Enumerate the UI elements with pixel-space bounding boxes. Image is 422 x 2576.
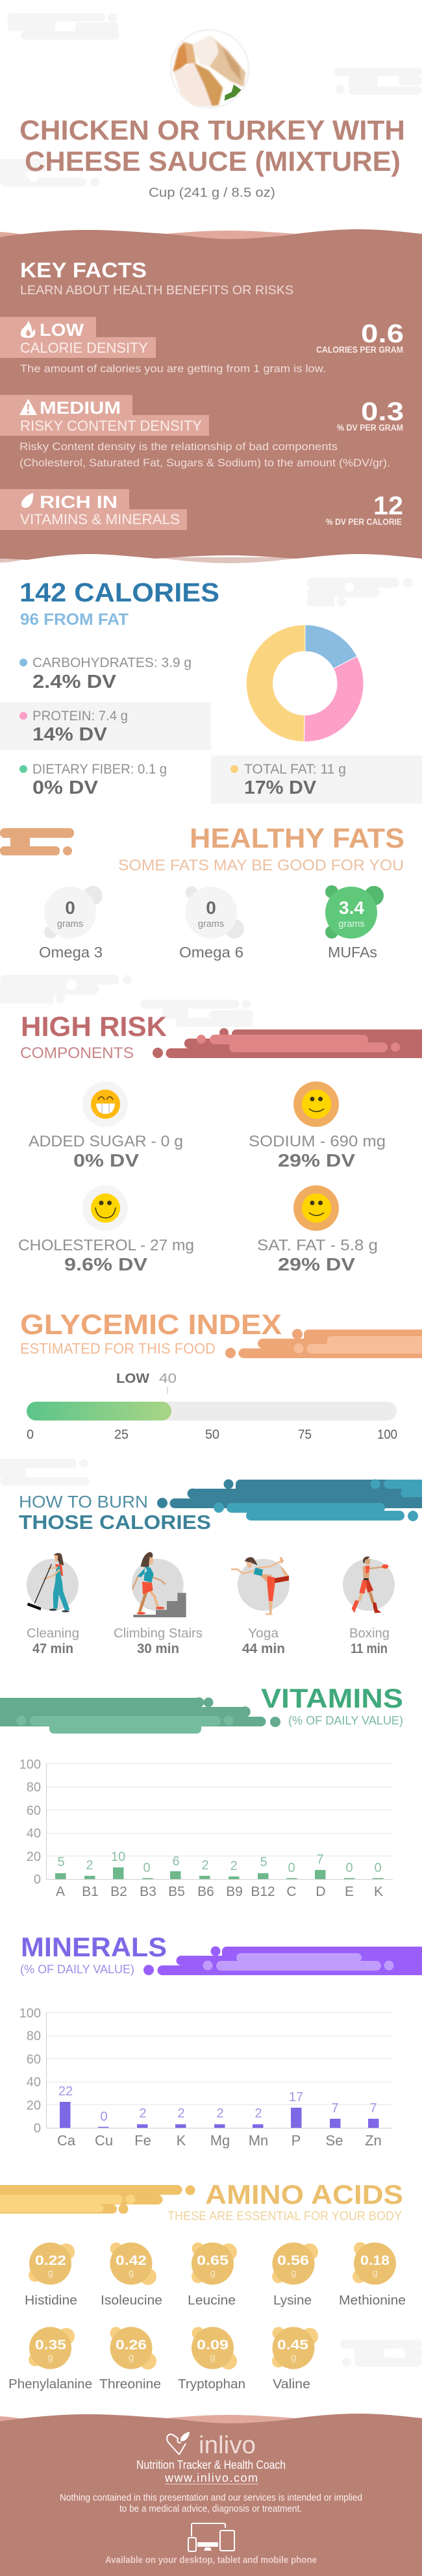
- decoration: burn streak: [157, 1480, 422, 1521]
- stat: 12 percent dv per calorie: [326, 492, 403, 527]
- stat: 0.3 percent dv per gram: % DV PER GRAM: [337, 423, 403, 433]
- text: availability: Available on your desktop, tablet and mobile phone: [105, 2555, 317, 2566]
- decoration: glycemic streak: [225, 1329, 422, 1358]
- stat: 0.6 calories per gram: 0.6: [361, 320, 404, 348]
- heading: vitamins: VITAMINS: [261, 1683, 403, 1713]
- row: protein: [0, 702, 211, 750]
- icon: leaf: [21, 493, 33, 508]
- activity: boxing: 11 min: [351, 1641, 388, 1656]
- risk item: sodium: [249, 1081, 386, 1170]
- amino: valine: 0.45: [277, 2338, 308, 2353]
- chart: vitamins bar chart: B3: [140, 1884, 156, 1899]
- chart: minerals bar chart: Se: [326, 2132, 343, 2149]
- heading: glycemic index: GLYCEMIC INDEX: [20, 1309, 282, 1341]
- chart: vitamins bar chart: A: [56, 1884, 65, 1899]
- chart: vitamins bar chart: 0: [374, 1861, 382, 1875]
- chart: vitamins bar chart: B5: [168, 1884, 185, 1899]
- risk item: saturated fat: 29% DV: [278, 1254, 355, 1274]
- decoration: amino acids streak: [0, 2185, 195, 2214]
- row: carbohydrates: 2.4% DV: [32, 672, 117, 692]
- chart: vitamins bar chart: 60: [27, 1804, 41, 1818]
- amino: histidine: g: [47, 2267, 53, 2279]
- title: CHEESE SAUCE (MIXTURE): [25, 146, 401, 177]
- chart: minerals bar chart: 2: [254, 2106, 262, 2121]
- amino: phenylalanine: Phenylalanine: [8, 2377, 92, 2392]
- heading: amino acids: AMINO ACIDS: [205, 2179, 403, 2210]
- icon: woman in yoga pose: [231, 1557, 290, 1615]
- chart: vitamins bar chart: B2: [110, 1884, 127, 1899]
- amino: tryptophan: Tryptophan: [178, 2377, 245, 2392]
- stat: omega 6: [179, 886, 244, 961]
- chart: vitamins bar chart: C: [286, 1884, 297, 1899]
- chart: glycemic index scale: LOW: [116, 1371, 149, 1386]
- logo: inlivo: [167, 2432, 256, 2459]
- row: protein: PROTEIN: 7.4 g: [32, 709, 128, 724]
- chart: glycemic index scale: 75: [298, 1428, 312, 1442]
- amino: methionine: 0.18: [360, 2253, 390, 2268]
- chart: vitamins bar chart: 6: [172, 1854, 180, 1869]
- chart: vitamins bar chart: B1: [82, 1884, 99, 1899]
- amino: leucine: g: [210, 2267, 216, 2279]
- icon: flame: [21, 320, 35, 338]
- stat: omega 6: 0: [206, 898, 216, 918]
- chart: vitamins bar chart: 5: [57, 1855, 65, 1869]
- stat: mufas: MUFAs: [328, 944, 377, 961]
- chart: vitamins bar chart: 5: [260, 1855, 267, 1869]
- text: disclaimer: to be a medical advice, diagnosis or treatment.: [119, 2503, 302, 2514]
- text: risky content note: (Cholesterol, Saturated Fat, Sugars & Sodium) to the amount (%DV/gr).: [19, 457, 390, 469]
- icon: smiling face: [91, 1194, 120, 1222]
- title: [19, 115, 405, 177]
- stat: 0.3 percent dv per gram: 0.3: [361, 398, 404, 426]
- chart: macronutrient donut: [246, 625, 364, 742]
- heading: calories: 142 CALORIES: [19, 577, 219, 607]
- stat: omega 3: 0: [65, 898, 75, 918]
- tag: rich in vitamins and minerals: VITAMINS & MINERALS: [20, 511, 180, 527]
- chart: minerals bar chart: P: [292, 2132, 301, 2149]
- subheading: calories from fat: 96 FROM FAT: [20, 611, 129, 629]
- activity: yoga: [231, 1557, 290, 1656]
- decoration: vitamins streak: [0, 1697, 280, 1734]
- amino: isoleucine: 0.42: [116, 2253, 147, 2268]
- chart: vitamins bar chart: 20: [27, 1850, 41, 1864]
- tag: low calorie density: LOW: [40, 320, 84, 340]
- stat: omega 6: Omega 6: [179, 944, 243, 961]
- chart: minerals bar chart: Ca: [57, 2132, 76, 2149]
- stat: mufas: [325, 885, 384, 961]
- risk item: cholesterol: CHOLESTEROL - 27 mg: [18, 1237, 194, 1254]
- chart: minerals bar chart: 2: [216, 2106, 224, 2121]
- stat: 0.3 percent dv per gram: [337, 398, 404, 433]
- tag: rich in vitamins and minerals: [0, 489, 187, 530]
- serving size: Cup (241 g / 8.5 oz): [149, 186, 275, 200]
- row: dietary fiber: 0% DV: [32, 777, 99, 798]
- amino: threonine: Threonine: [99, 2377, 161, 2392]
- amino: threonine: [99, 2327, 161, 2392]
- tag: medium risky content density: MEDIUM: [40, 398, 121, 418]
- amino: lysine: g: [291, 2267, 296, 2279]
- amino: methionine: g: [372, 2267, 378, 2279]
- amino: phenylalanine: g: [47, 2352, 53, 2363]
- chart: minerals bar chart: Cu: [95, 2132, 113, 2149]
- chart: minerals bar chart: [19, 2006, 393, 2149]
- heading: those calories: THOSE CALORIES: [19, 1511, 211, 1534]
- chart: minerals bar chart: 17: [289, 2090, 303, 2104]
- chart: vitamins bar chart: D: [316, 1884, 326, 1899]
- heading: minerals: MINERALS: [21, 1932, 167, 1962]
- subheading: amino acids: THESE ARE ESSENTIAL FOR YOUR BODY: [168, 2209, 402, 2223]
- subheading: components: COMPONENTS: [20, 1044, 134, 1062]
- stat: mufas: grams: [338, 919, 365, 929]
- amino: tryptophan: g: [210, 2352, 216, 2363]
- row: total fat: 17% DV: [244, 777, 317, 798]
- chart: minerals bar chart: 2: [139, 2106, 147, 2121]
- chart: minerals bar chart: Zn: [365, 2132, 382, 2149]
- activity: yoga: Yoga: [248, 1626, 279, 1641]
- chart: minerals bar chart: Mn: [249, 2132, 268, 2149]
- tag: low calorie density: [0, 317, 156, 358]
- chart: minerals bar chart: 100: [19, 2006, 41, 2021]
- chart: minerals bar chart: 2: [177, 2106, 185, 2121]
- tag: low calorie density: CALORIE DENSITY: [20, 340, 148, 356]
- chart: vitamins bar chart: 10: [111, 1850, 125, 1864]
- chart: minerals bar chart: 22: [58, 2084, 73, 2099]
- text: risky content note: Risky Content density is the relationship of bad components: [19, 441, 338, 453]
- risk item: cholesterol: [18, 1185, 194, 1274]
- tag: medium risky content density: RISKY CONTENT DENSITY: [20, 418, 202, 434]
- text: website: www.inlivo.com: [164, 2471, 258, 2484]
- risk item: saturated fat: [257, 1185, 378, 1274]
- activity: yoga: 44 min: [242, 1641, 285, 1656]
- subheading: minerals: (% OF DAILY VALUE): [20, 1963, 134, 1976]
- risk item: sodium: SODIUM - 690 mg: [249, 1133, 386, 1150]
- chart: vitamins bar chart: E: [345, 1884, 354, 1899]
- chart: minerals bar chart: 0: [34, 2121, 41, 2136]
- amino: lysine: 0.56: [277, 2253, 309, 2268]
- activity: boxing: [343, 1556, 395, 1656]
- amino: histidine: Histidine: [25, 2293, 77, 2308]
- stat: omega 6: grams: [198, 919, 224, 929]
- stat: omega 3: Omega 3: [39, 944, 103, 961]
- stat: 0.6 calories per gram: CALORIES PER GRAM: [316, 345, 403, 355]
- stat: 0.6 calories per gram: [316, 320, 404, 355]
- chart: minerals bar chart: 80: [27, 2029, 41, 2043]
- icon: woman on stairs: [132, 1552, 186, 1617]
- chart: vitamins bar chart: 0: [345, 1861, 353, 1875]
- tag: rich in vitamins and minerals: RICH IN: [40, 492, 118, 512]
- chart: vitamins bar chart: 100: [19, 1758, 41, 1772]
- chart: minerals bar chart: Fe: [134, 2132, 151, 2149]
- amino: isoleucine: [101, 2242, 162, 2308]
- chart: minerals bar chart: 60: [27, 2052, 41, 2067]
- risk item: cholesterol: 9.6% DV: [64, 1254, 147, 1274]
- chart: minerals bar chart: Mg: [210, 2132, 230, 2149]
- chart: vitamins bar chart: 7: [316, 1852, 324, 1867]
- row: carbohydrates: CARBOHYDRATES: 3.9 g: [32, 655, 192, 670]
- stat: 12 percent dv per calorie: 12: [373, 492, 403, 520]
- activity: climbing stairs: [114, 1552, 203, 1656]
- activity: climbing stairs: 30 min: [137, 1641, 179, 1656]
- chart: vitamins bar chart: 2: [201, 1858, 209, 1873]
- amino: leucine: 0.65: [197, 2253, 229, 2268]
- amino: valine: Valine: [273, 2377, 310, 2392]
- subheading: key facts: LEARN ABOUT HEALTH BENEFITS OR RISKS: [20, 284, 293, 297]
- amino: histidine: [25, 2242, 77, 2308]
- chart: vitamins bar chart: B12: [251, 1884, 275, 1899]
- decoration: healthy fats streak: [0, 828, 74, 855]
- row: total fat: [211, 755, 422, 803]
- amino: isoleucine: Isoleucine: [101, 2293, 162, 2308]
- risk item: added sugar: ADDED SUGAR - 0 g: [29, 1133, 183, 1150]
- activity: climbing stairs: Climbing Stairs: [114, 1626, 203, 1641]
- stat: 12 percent dv per calorie: % DV PER CALORIE: [326, 517, 402, 527]
- amino: tryptophan: [178, 2327, 245, 2392]
- chart: glycemic index scale: 0: [27, 1428, 34, 1442]
- chart: minerals bar chart: K: [177, 2132, 186, 2149]
- stat: mufas: 3.4: [339, 898, 364, 918]
- icon: smiling face: [302, 1090, 331, 1118]
- row: total fat: TOTAL FAT: 11 g: [244, 762, 346, 777]
- amino: tryptophan: 0.09: [197, 2338, 229, 2353]
- tag: medium risky content density: [0, 395, 209, 436]
- amino: phenylalanine: [8, 2327, 92, 2392]
- icon: devices: [188, 2523, 234, 2551]
- amino: threonine: 0.26: [116, 2338, 147, 2353]
- amino: valine: [272, 2327, 318, 2392]
- chart: glycemic index scale: 50: [205, 1428, 219, 1442]
- activity: cleaning: 47 min: [32, 1641, 73, 1656]
- risk item: saturated fat: SAT. FAT - 5.8 g: [257, 1237, 378, 1254]
- chart: minerals bar chart: 7: [369, 2101, 377, 2115]
- subheading: glycemic index: ESTIMATED FOR THIS FOOD: [20, 1340, 216, 1357]
- text: disclaimer: [60, 2492, 362, 2514]
- amino: leucine: [188, 2242, 237, 2308]
- subheading: vitamins: (% OF DAILY VALUE): [288, 1714, 403, 1727]
- stat: omega 3: [39, 886, 103, 961]
- chart: vitamins bar chart: B6: [197, 1884, 214, 1899]
- chart: glycemic index scale: 40: [159, 1371, 177, 1386]
- amino: lysine: Lysine: [273, 2293, 312, 2308]
- text: risky content note: [19, 441, 390, 469]
- row: carbohydrates: [19, 655, 192, 692]
- chart: glycemic index scale: 25: [114, 1428, 129, 1442]
- risk item: sodium: 29% DV: [278, 1150, 355, 1170]
- heading: key facts: KEY FACTS: [20, 259, 147, 282]
- icon: smiling face: [302, 1194, 331, 1222]
- heading: high risk: HIGH RISK: [21, 1011, 167, 1042]
- text: low calorie density note: The amount of calories you are getting from 1 gram is low.: [20, 363, 326, 375]
- chart: minerals bar chart: 0: [100, 2110, 108, 2124]
- activity: cleaning: [27, 1553, 79, 1656]
- amino: methionine: [339, 2242, 406, 2308]
- chart: vitamins bar chart: 0: [34, 1873, 41, 1887]
- chart: vitamins bar chart: 80: [27, 1780, 41, 1795]
- icon: woman sweeping: [27, 1553, 79, 1612]
- icon: warning: [19, 399, 37, 415]
- row: protein: 14% DV: [32, 724, 108, 745]
- stat: omega 3: grams: [57, 919, 83, 929]
- heading: how to burn: HOW TO BURN: [19, 1492, 148, 1511]
- panel: key facts: [0, 229, 422, 563]
- chart: vitamins bar chart: 2: [86, 1858, 93, 1873]
- risk item: added sugar: [29, 1081, 183, 1170]
- icon: boxer: [343, 1556, 395, 1613]
- row: dietary fiber: DIETARY FIBER: 0.1 g: [32, 762, 167, 777]
- amino: valine: g: [291, 2352, 296, 2363]
- decoration: high risk streak: [153, 1028, 422, 1058]
- chart: vitamins bar chart: 40: [27, 1826, 41, 1841]
- amino: methionine: Methionine: [339, 2293, 406, 2308]
- subheading: healthy fats: SOME FATS MAY BE GOOD FOR YOU: [118, 857, 404, 874]
- chart: vitamins bar chart: B9: [226, 1884, 243, 1899]
- decoration: minerals streak: [143, 1946, 422, 1975]
- chart: vitamins bar chart: 2: [230, 1859, 238, 1873]
- activity: cleaning: Cleaning: [27, 1626, 79, 1641]
- chart: vitamins bar chart: 0: [143, 1861, 151, 1875]
- chart: minerals bar chart: 20: [27, 2099, 41, 2113]
- heading: healthy fats: HEALTHY FATS: [190, 823, 404, 854]
- logo: inlivo: inlivo: [199, 2432, 256, 2459]
- amino: threonine: g: [129, 2352, 134, 2363]
- amino: lysine: [272, 2242, 318, 2308]
- chart: minerals bar chart: 7: [331, 2101, 339, 2115]
- amino: phenylalanine: 0.35: [35, 2338, 66, 2353]
- footer: [0, 2414, 422, 2576]
- image: chicken photo: [171, 30, 249, 108]
- chart: vitamins bar chart: 0: [288, 1861, 295, 1875]
- chart: glycemic index scale: [27, 1371, 397, 1442]
- icon: grinning face: [91, 1090, 120, 1118]
- risk item: added sugar: 0% DV: [73, 1150, 139, 1170]
- text: tagline: Nutrition Tracker & Health Coach: [136, 2458, 286, 2471]
- amino: histidine: 0.22: [35, 2253, 66, 2268]
- text: disclaimer: Nothing contained in this presentation and our services is intended or implied: [60, 2492, 362, 2503]
- title: CHICKEN OR TURKEY WITH: [19, 115, 405, 146]
- chart: vitamins bar chart: [19, 1758, 393, 1899]
- amino: isoleucine: g: [129, 2267, 134, 2279]
- chart: vitamins bar chart: K: [374, 1884, 383, 1899]
- chart: glycemic index scale: 100: [377, 1428, 397, 1442]
- activity: boxing: Boxing: [349, 1626, 390, 1641]
- row: dietary fiber: [19, 762, 167, 798]
- amino: leucine: Leucine: [188, 2293, 236, 2308]
- chart: minerals bar chart: 40: [27, 2075, 41, 2090]
